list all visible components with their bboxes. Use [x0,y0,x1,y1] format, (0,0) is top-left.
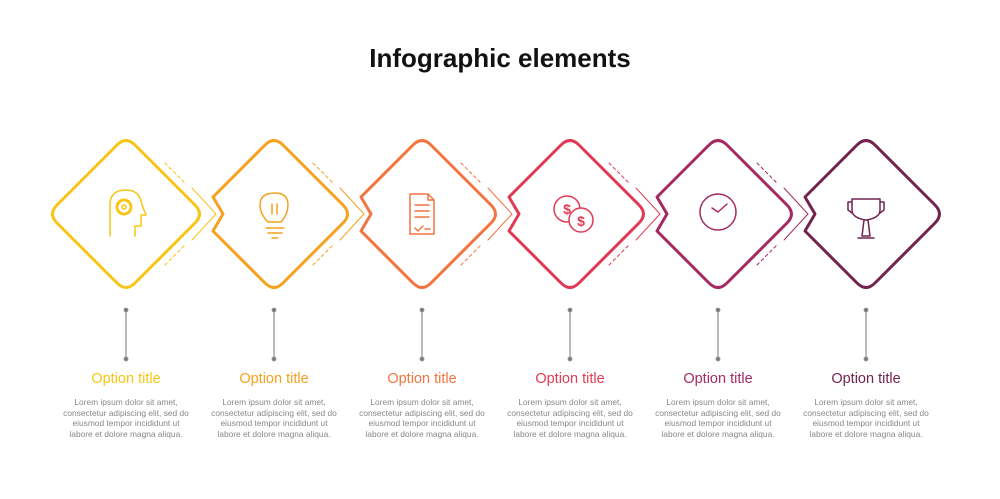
icon: document [410,194,434,234]
text: option 1 [63,371,189,438]
text: option 2: labore et dolore magna aliqua. [217,428,331,438]
connector lines [124,308,868,361]
icon: trophy [848,199,884,238]
text: option 1: Lorem ipsum dolor sit amet, [74,397,178,407]
step 3 diamond [361,140,512,288]
icon: clock [700,194,736,230]
icon: head gear [110,190,146,236]
text: option 6: eiusmod tempor incididunt ut [812,418,920,428]
icon: light bulb [260,193,288,238]
text: option 1: eiusmod tempor incididunt ut [72,418,180,428]
step 6 diamond [805,140,940,288]
text: option 3: labore et dolore magna aliqua. [365,428,479,438]
step 5 diamond [657,140,808,288]
step 1 diamond [52,140,216,288]
text: option 5: labore et dolore magna aliqua. [661,428,775,438]
text: option 3: eiusmod tempor incididunt ut [368,418,476,428]
text: option 6: consectetur adipiscing elit, sed do [803,408,929,418]
text: option 2: Option title [239,371,309,387]
step 2 diamond [213,140,364,288]
text: option 4: labore et dolore magna aliqua. [513,428,627,438]
title: Infographic elements [369,43,631,73]
text: option 4: consectetur adipiscing elit, sed do [507,408,633,418]
text: option 4: Option title [535,371,605,387]
text: option 4 [507,371,633,438]
text: option 3: consectetur adipiscing elit, sed do [359,408,485,418]
text: option 6 [803,371,929,438]
text: option 2: eiusmod tempor incididunt ut [220,418,328,428]
text: option 2: consectetur adipiscing elit, sed do [211,408,337,418]
icon: coins: $ [563,201,571,217]
text: option 6: Lorem ipsum dolor sit amet, [814,397,918,407]
icon: coins [554,196,593,232]
icon: coins: $ [577,213,585,229]
text: option 5: eiusmod tempor incididunt ut [664,418,772,428]
text: option 3 [359,371,485,438]
text: option 2 [211,371,337,438]
text: option 3: Option title [387,371,457,387]
text: option 5 [655,371,781,438]
text: option 5: consectetur adipiscing elit, sed do [655,408,781,418]
text: option 2: Lorem ipsum dolor sit amet, [222,397,326,407]
text: option 1: consectetur adipiscing elit, sed do [63,408,189,418]
text: option 1: Option title [91,371,161,387]
text: option 6: labore et dolore magna aliqua. [809,428,923,438]
text: option 6: Option title [831,371,901,387]
text: option 4: eiusmod tempor incididunt ut [516,418,624,428]
text: option 5: Option title [683,371,753,387]
text: option 4: Lorem ipsum dolor sit amet, [518,397,622,407]
text: option 1: labore et dolore magna aliqua. [69,428,183,438]
step 4 diamond [509,140,660,288]
text: option 5: Lorem ipsum dolor sit amet, [666,397,770,407]
text: option 3: Lorem ipsum dolor sit amet, [370,397,474,407]
